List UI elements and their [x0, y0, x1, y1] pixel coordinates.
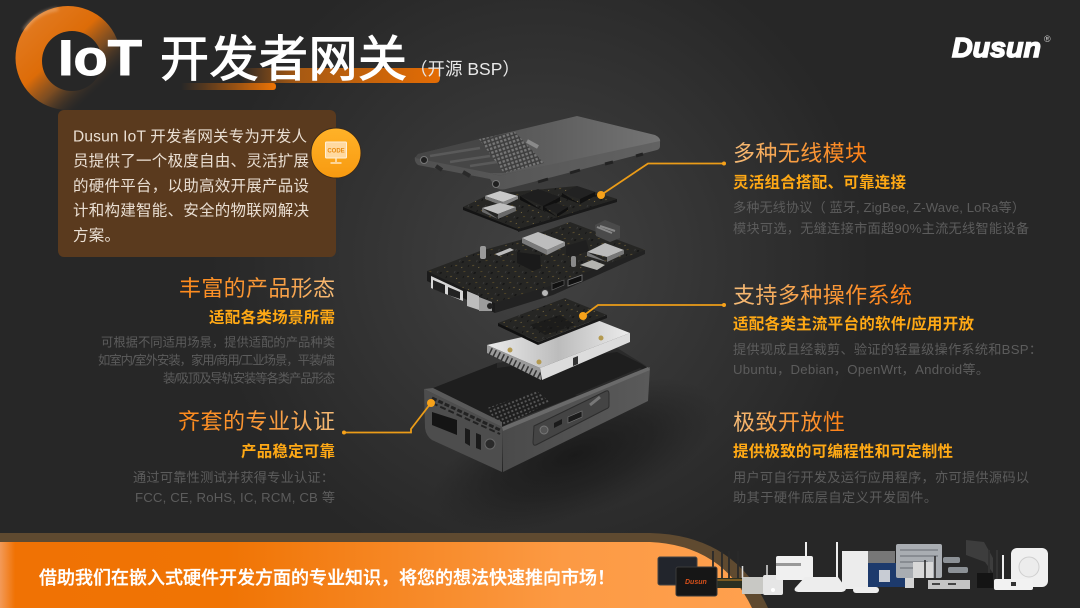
outdoor gateway [896, 544, 970, 589]
silver shield [522, 232, 565, 250]
black gateways [658, 551, 742, 596]
feature: certification: 齐套的专业认证 [178, 409, 335, 434]
feature: product forms: 如室内/室外安装，家用/商用/工业场景，平装/墙 [98, 352, 335, 368]
white routers [742, 542, 868, 595]
feature: product forms: 适配各类场景所需 [209, 308, 335, 326]
exploded gateway illustration [413, 116, 737, 565]
icon: code monitor: CODE [327, 148, 345, 154]
panel: introduction: Dusun IoT 开发者网关专为开发人 [73, 128, 307, 146]
drop shadow [413, 345, 737, 565]
logo: Dusun: Dusun [952, 32, 1041, 63]
black gateways: Dusun [685, 579, 707, 586]
feature: wireless modules: 模块可选，无缝连接市面超90%主流无线智能设备 [733, 220, 1029, 236]
dark router [966, 540, 997, 588]
feature: openness: 助其于硬件底层自定义开发固件。 [733, 490, 937, 505]
black inductor block [517, 252, 541, 271]
feature: operating systems: 适配各类主流平台的软件/应用开放 [733, 314, 974, 333]
feature: operating systems [733, 283, 1042, 377]
panel: introduction: 员提供了一个极度自由、灵活扩展 [73, 152, 309, 170]
feature: operating systems: Ubuntu，Debian，OpenWrt，Android等。 [733, 361, 989, 377]
footer banner [0, 533, 768, 608]
footer banner: 借助我们在嵌入式硬件开发方面的专业知识，将您的想法快速推向市场！ [39, 568, 615, 588]
right silver module [587, 243, 624, 257]
callout: certification [342, 399, 435, 434]
white square hub [994, 548, 1048, 590]
title [58, 30, 520, 87]
feature: operating systems: 提供现成且经裁剪、验证的轻量级操作系统和BSP： [733, 342, 1042, 357]
feature: wireless modules [733, 141, 1029, 236]
feature: product forms: 装/吸顶及导轨安装等各类产品形态 [163, 370, 335, 386]
title: IoT [58, 30, 142, 86]
lower circuit board [498, 298, 607, 345]
heatsink [487, 320, 630, 380]
touch screen gateway [853, 551, 914, 593]
product lineup [658, 540, 1048, 596]
decorative ring behind title [16, 6, 120, 110]
terminal connector [595, 220, 620, 242]
usb connector blocks [467, 291, 479, 310]
feature: wireless modules: 多种无线模块 [733, 141, 867, 166]
icon: code monitor [311, 128, 361, 178]
title: 开发者网关 [160, 33, 407, 87]
panel: introduction: 的硬件平台，以助高效开展产品设 [73, 177, 309, 195]
title underline bars [181, 68, 440, 90]
title: （开源 BSP） [410, 59, 520, 79]
feature: openness: 提供极致的可编程性和可定制性 [733, 442, 953, 460]
feature: wireless modules: 灵活组合搭配、可靠连接 [733, 172, 906, 192]
feature: certification: 产品稳定可靠 [241, 442, 335, 460]
feature: product forms: 丰富的产品形态 [179, 276, 335, 301]
callout: wireless module [597, 162, 726, 199]
feature: certification: FCC, CE, RoHS, IC, RCM, CB 等 [135, 489, 335, 505]
feature: wireless modules: 多种无线协议（ 蓝牙, ZigBee, Z-Wave, LoRa等） [733, 199, 1025, 215]
feature: certification [133, 409, 335, 505]
logo: Dusun: ® [1044, 34, 1051, 44]
capacitor [480, 246, 486, 259]
top lid [415, 116, 660, 190]
feature: certification: 通过可靠性测试并获得专业认证： [133, 469, 334, 485]
callout: operating system [579, 303, 726, 320]
feature: operating systems: 支持多种操作系统 [733, 283, 912, 308]
feature: openness [733, 410, 1029, 505]
panel: introduction: 方案。 [73, 226, 120, 244]
main circuit board [427, 220, 645, 313]
panel: introduction: 计和构建智能、安全的物联网解决 [73, 202, 309, 220]
enclosure base [424, 348, 650, 472]
panel: introduction [58, 110, 336, 257]
ethernet ports [431, 276, 463, 301]
feature: product forms [98, 276, 335, 386]
feature: openness: 极致开放性 [733, 410, 845, 435]
feature: product forms: 可根据不同适用场景，提供适配的产品种类 [101, 334, 335, 350]
feature: openness: 用户可自行开发及运行应用程序，亦可提供源码以 [733, 469, 1029, 485]
upper circuit board [463, 186, 617, 232]
